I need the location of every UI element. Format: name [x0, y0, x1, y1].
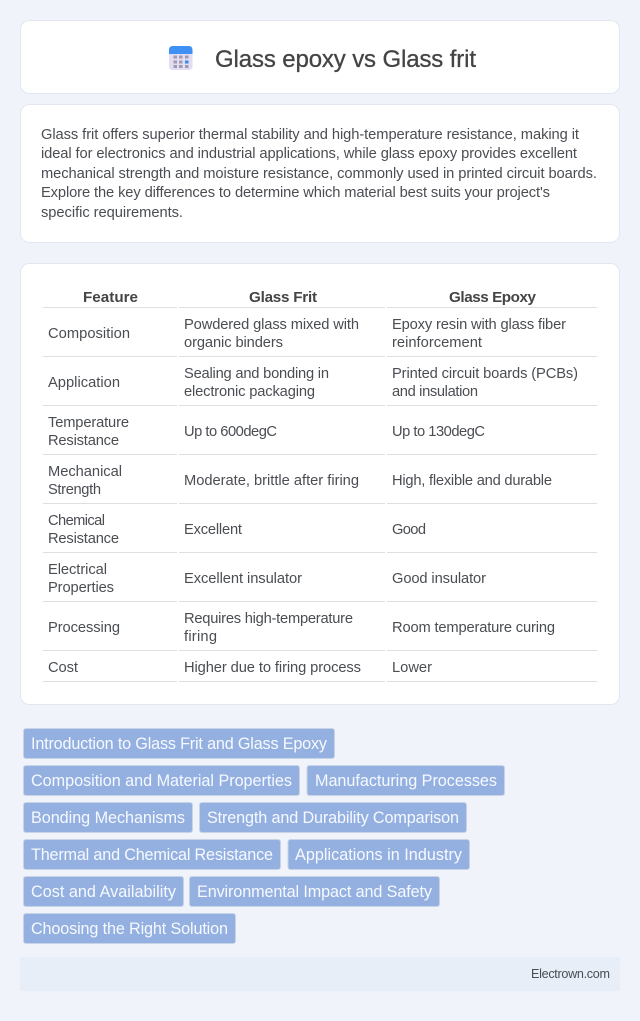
row: temperature resistance: Up to 600degC — [184, 424, 277, 440]
row: composition — [48, 317, 566, 351]
row: cost: Lower — [392, 660, 432, 676]
tag: strength: Strength and Durability Comparison — [207, 809, 459, 827]
row: temperature resistance: Resistance — [48, 433, 119, 449]
row: cost — [48, 660, 432, 676]
topic tags — [24, 728, 504, 944]
tag: cost: Cost and Availability — [31, 883, 177, 901]
title: Glass epoxy vs Glass frit — [215, 46, 476, 73]
row: composition: reinforcement — [392, 335, 482, 351]
row: composition: Epoxy resin with glass fiber — [392, 317, 566, 333]
row: chemical resistance: Chemical — [48, 513, 105, 529]
row: application — [48, 366, 578, 400]
row: electrical properties: Excellent insulator — [184, 571, 302, 587]
tag: bonding: Bonding Mechanisms — [31, 809, 185, 827]
row: mechanical strength — [48, 464, 552, 498]
row: processing: firing — [184, 629, 217, 645]
row: chemical resistance: Excellent — [184, 522, 242, 538]
intro text: mechanical strength and moisture resistance, commonly used in printed circuit boards. — [41, 166, 597, 182]
row: mechanical strength: High, flexible and durable — [392, 473, 552, 489]
tag: introduction: Introduction to Glass Frit and Glass Epoxy — [31, 735, 328, 753]
table header — [83, 289, 537, 306]
tag: environmental — [190, 876, 440, 906]
intro text — [41, 127, 597, 221]
tag: strength — [200, 802, 466, 832]
row: processing: Requires high-temperature — [184, 611, 353, 627]
row: application: electronic packaging — [184, 384, 315, 400]
row: electrical properties: Properties — [48, 580, 114, 596]
row: application: and insulation — [392, 384, 478, 400]
tag: thermal — [24, 840, 280, 870]
row: mechanical strength: Strength — [48, 482, 101, 498]
table rules — [43, 307, 597, 682]
tag: environmental: Environmental Impact and Safety — [197, 883, 433, 901]
row: mechanical strength: Mechanical — [48, 464, 122, 480]
footer: Electrown.com — [531, 967, 610, 981]
row: temperature resistance: Up to 130degC — [392, 424, 485, 440]
tag: manufacturing: Manufacturing Processes — [315, 772, 497, 790]
panel: introduction — [20, 104, 620, 242]
panel: comparison table — [20, 264, 620, 704]
tag: applications — [288, 840, 470, 870]
row: electrical properties — [48, 562, 486, 596]
row: processing: Room temperature curing — [392, 620, 555, 636]
tag: bonding — [24, 802, 192, 832]
row: application: Printed circuit boards (PCBs) — [392, 366, 578, 382]
row: processing: Processing — [48, 620, 120, 636]
panel: header — [20, 20, 620, 94]
footer — [20, 957, 620, 991]
row: temperature resistance — [48, 415, 485, 449]
row: composition: Composition — [48, 326, 130, 342]
intro text: ideal for electronics and industrial applications, while glass epoxy provides excellent — [41, 146, 577, 162]
row: composition: organic binders — [184, 335, 283, 351]
tag: introduction — [24, 728, 334, 758]
row: chemical resistance: Good — [392, 522, 426, 538]
tag: thermal: Thermal and Chemical Resistance — [31, 846, 273, 864]
row: processing — [48, 611, 555, 645]
row: chemical resistance — [48, 513, 426, 547]
tag: choosing: Choosing the Right Solution — [31, 920, 228, 938]
tag: choosing — [24, 914, 236, 944]
table header: Glass Frit — [249, 289, 317, 306]
row: cost: Higher due to firing process — [184, 660, 361, 676]
row: mechanical strength: Moderate, brittle after firing — [184, 473, 359, 489]
intro text: Explore the key differences to determine which material best suits your project's — [41, 185, 550, 201]
table header: Glass Epoxy — [449, 289, 537, 306]
intro text: specific requirements. — [41, 205, 183, 221]
row: electrical properties: Electrical — [48, 562, 107, 578]
row: electrical properties: Good insulator — [392, 571, 486, 587]
tag: applications: Applications in Industry — [295, 846, 463, 864]
intro text: Glass frit offers superior thermal stability and high-temperature resistance, making it — [41, 127, 579, 143]
row: chemical resistance: Resistance — [48, 531, 119, 547]
row: cost: Cost — [48, 660, 78, 676]
tag: composition — [24, 766, 300, 796]
icon: calendar grid — [169, 46, 192, 70]
tag: manufacturing — [307, 766, 504, 796]
row: application: Sealing and bonding in — [184, 366, 329, 382]
tag: composition: Composition and Material Properties — [31, 772, 292, 790]
row: composition: Powdered glass mixed with — [184, 317, 359, 333]
tag: cost — [24, 876, 184, 906]
row: temperature resistance: Temperature — [48, 415, 129, 431]
row: application: Application — [48, 375, 120, 391]
table header: Feature — [83, 289, 138, 306]
